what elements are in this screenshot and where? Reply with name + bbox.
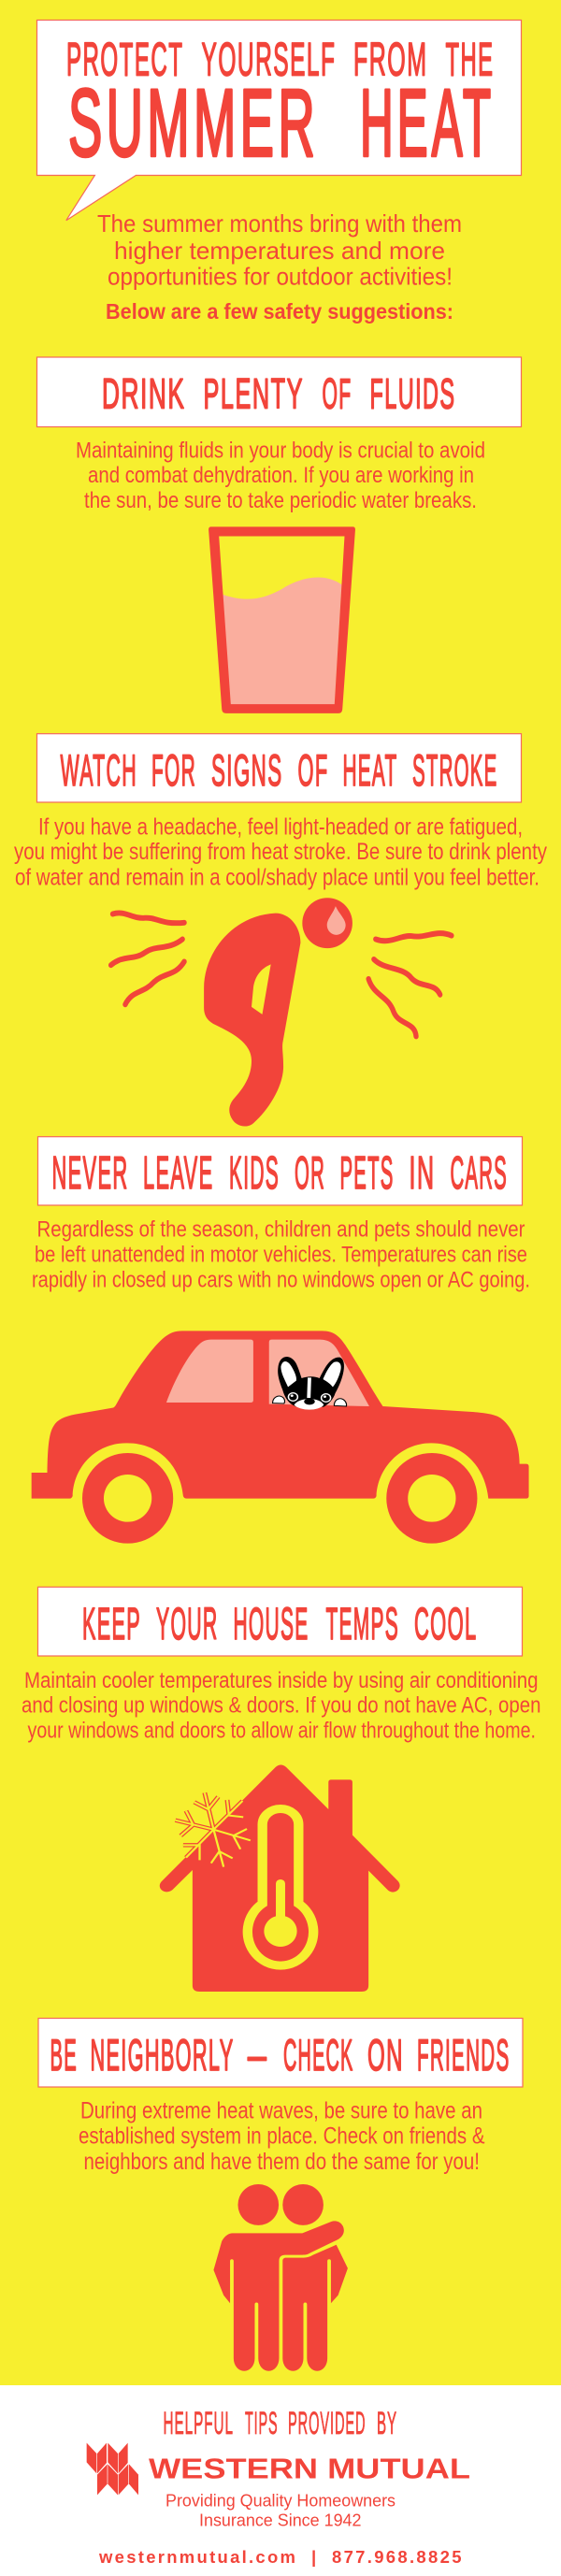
heading: watch for signs of heat stroke: OF xyxy=(297,745,329,795)
title line: protect yourself from the: FROM xyxy=(353,34,428,86)
website and phone: | xyxy=(311,2547,316,2567)
intro text: opportunities for outdoor activities! xyxy=(108,262,453,290)
text: cars xyxy=(32,1217,530,1293)
text: neighbors: During extreme heat waves, be sure to have an xyxy=(80,2098,482,2124)
title line: summer heat: SUMMER xyxy=(68,69,319,176)
heading: drink plenty of fluids: DRINK xyxy=(102,370,185,417)
heading: never leave kids or pets in cars: PETS xyxy=(340,1148,395,1199)
heading: never leave kids or pets in cars: LEAVE xyxy=(143,1148,213,1199)
heading: watch for signs of heat stroke: SIGNS xyxy=(211,745,282,795)
heading: be neighborly - check on friends xyxy=(38,2018,523,2087)
title line: protect yourself from the xyxy=(66,34,494,86)
icon: house with thermometer and snowflake xyxy=(160,1764,400,1992)
friend with arm around xyxy=(213,2221,344,2371)
heading: keep your house temps cool: TEMPS xyxy=(325,1600,399,1649)
head xyxy=(302,898,352,948)
snowflake xyxy=(175,1792,251,1867)
thermometer xyxy=(248,1809,313,1965)
text: neighbors: established system in place. Check on friends & xyxy=(79,2123,485,2150)
website and phone: westernmutual.com xyxy=(98,2547,295,2567)
sweat drop xyxy=(327,906,346,935)
heat squiggles xyxy=(111,913,452,1036)
heading: drink plenty of fluids: FLUIDS xyxy=(370,370,456,417)
dog peeking out xyxy=(273,1357,347,1410)
heading: be neighborly - check on friends: – xyxy=(248,2030,268,2080)
heading: be neighborly - check on friends: ON xyxy=(367,2030,404,2080)
heading: be neighborly - check on friends: CHECK xyxy=(283,2030,353,2080)
text: heat stroke xyxy=(14,813,547,890)
heading: drink plenty of fluids xyxy=(37,357,522,426)
helpful tips heading: PROVIDED xyxy=(288,2406,367,2441)
car body xyxy=(32,1331,529,1499)
helpful tips heading xyxy=(163,2406,397,2441)
logo mark xyxy=(87,2443,138,2495)
icon: car with dog xyxy=(32,1331,529,1544)
footer panel xyxy=(0,2385,561,2576)
website and phone: 877.968.8825 xyxy=(332,2547,462,2567)
icon: two friends xyxy=(213,2184,348,2371)
footer panel: BY xyxy=(377,2406,397,2441)
heading: watch for signs of heat stroke xyxy=(37,734,522,802)
company name: WESTERN MUTUAL xyxy=(149,2454,470,2485)
windows xyxy=(166,1340,369,1406)
heading: watch for signs of heat stroke: HEAT xyxy=(342,745,398,795)
heading: be neighborly - check on friends: NEIGHBORLY xyxy=(90,2030,234,2080)
heading: drink plenty of fluids: OF xyxy=(322,370,352,417)
website and phone xyxy=(98,2547,462,2567)
second friend xyxy=(282,2245,348,2371)
heading: keep your house temps cool: YOUR xyxy=(156,1600,219,1649)
heading: never leave kids or pets in cars: IN xyxy=(410,1148,436,1199)
intro text: Below are a few safety suggestions: xyxy=(106,299,453,324)
heading: keep your house temps cool: KEEP xyxy=(82,1600,141,1649)
tagline xyxy=(165,2491,396,2530)
heading: keep your house temps cool xyxy=(37,1587,522,1656)
text: fluids xyxy=(76,438,485,513)
title line: protect yourself from the: PROTECT xyxy=(66,34,183,86)
tagline: Providing Quality Homeowners xyxy=(165,2491,396,2510)
tagline: Insurance Since 1942 xyxy=(199,2511,361,2530)
text: house xyxy=(22,1668,540,1743)
helpful tips heading: TIPS xyxy=(245,2406,279,2441)
icon: glass of water xyxy=(209,526,355,713)
heading: never leave kids or pets in cars: OR xyxy=(295,1148,325,1199)
intro text xyxy=(97,209,462,324)
text: neighbors xyxy=(79,2098,485,2175)
icon: person bent over with heat stroke xyxy=(111,898,452,1127)
intro text: higher temperatures and more xyxy=(114,237,445,265)
house xyxy=(160,1764,400,1992)
heading: drink plenty of fluids: PLENTY xyxy=(204,370,304,417)
text: fluids: the sun, be sure to take periodic water breaks. xyxy=(84,488,477,513)
heading: watch for signs of heat stroke: WATCH xyxy=(60,745,137,795)
intro text: The summer months bring with them xyxy=(97,209,462,237)
title line: protect yourself from the: YOURSELF xyxy=(202,34,337,86)
heading: never leave kids or pets in cars: KIDS xyxy=(229,1148,280,1199)
heading: be neighborly - check on friends: BE xyxy=(50,2030,78,2080)
heading: watch for signs of heat stroke: FOR xyxy=(151,745,196,795)
text: fluids: and combat dehydration. If you are working in xyxy=(88,463,474,488)
text: fluids: Maintaining fluids in your body is crucial to avoid xyxy=(76,438,485,463)
text: neighbors: neighbors and have them do the same for you! xyxy=(84,2149,480,2175)
heading: never leave kids or pets in cars: NEVER xyxy=(52,1148,129,1199)
title speech bubble: THE xyxy=(445,34,494,86)
heading: keep your house temps cool: HOUSE xyxy=(234,1600,309,1649)
wheels xyxy=(82,1453,477,1544)
heading: keep your house temps cool: COOL xyxy=(414,1600,477,1649)
helpful tips heading: HELPFUL xyxy=(163,2406,234,2441)
heading: never leave kids or pets in cars xyxy=(37,1137,522,1205)
title speech bubble xyxy=(37,21,522,221)
